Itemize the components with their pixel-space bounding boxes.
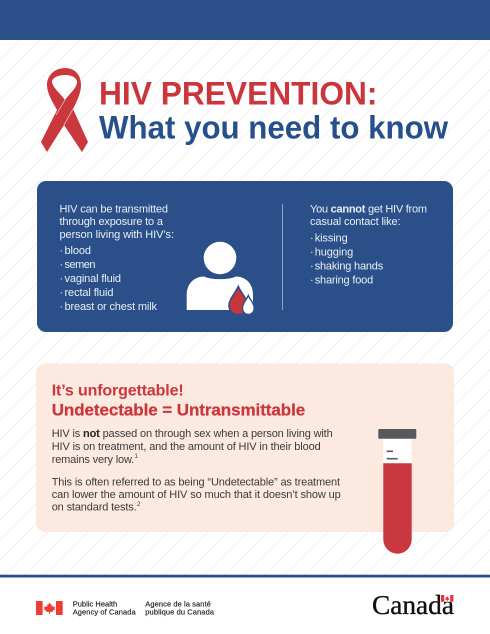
- panel: undetectable equals untransmittable: [36, 364, 454, 532]
- logo: Canada wordmark: Canada: [372, 589, 454, 620]
- agency name: Agence de la santé: [145, 600, 211, 609]
- heading: Undetectable = Untransmittable: [52, 401, 305, 420]
- text block: can be transmitted: rectal fluid: [64, 287, 114, 299]
- text block: casual contact: ·: [310, 274, 314, 286]
- text block: casual contact: ·: [310, 246, 314, 258]
- text block: explanation: HIV is not passed on through sex when a person living with: [52, 428, 333, 440]
- logo: Public Health Agency of Canada: [36, 600, 215, 617]
- text block: can be transmitted: semen: [64, 259, 96, 271]
- title: What you need to know: [99, 110, 448, 146]
- text block: can be transmitted: vaginal fluid: [64, 273, 121, 285]
- text block: explanation: [52, 428, 341, 514]
- text block: casual contact: casual contact like:: [310, 216, 400, 228]
- header band: [0, 0, 490, 40]
- text block: casual contact: ·: [310, 260, 314, 272]
- text block: can be transmitted: through exposure to a: [60, 216, 164, 228]
- text block: explanation: remains very low.: [52, 454, 134, 466]
- text block: can be transmitted: ·: [60, 301, 63, 313]
- text block: can be transmitted: blood: [64, 245, 91, 257]
- icon: person with fluid drops: [187, 242, 254, 314]
- text block: casual contact: You cannot get HIV from: [310, 203, 427, 215]
- title: HIV PREVENTION:: [99, 76, 378, 112]
- heading: It’s unforgettable!: [52, 383, 184, 400]
- text block: explanation: HIV is on treatment, and the amount of HIV in their blood: [52, 441, 321, 453]
- text block: explanation: This is often referred to as being “Undetectable” as treatment: [52, 476, 340, 488]
- text block: can be transmitted: ·: [60, 287, 63, 299]
- agency name: [73, 600, 215, 617]
- title: [99, 76, 448, 146]
- text block: casual contact: ·: [310, 232, 314, 244]
- text block: casual contact: hugging: [315, 246, 353, 258]
- heading: [52, 383, 305, 420]
- text block: can be transmitted: ·: [60, 273, 63, 285]
- text block: explanation: 2: [137, 502, 141, 508]
- text block: can be transmitted: ·: [60, 245, 63, 257]
- text block: casual contact: [310, 203, 427, 286]
- text block: casual contact: shaking hands: [315, 260, 384, 272]
- text block: explanation: on standard tests.: [52, 502, 137, 514]
- text block: can be transmitted: HIV can be transmitted: [60, 203, 168, 215]
- agency name: Agency of Canada: [73, 608, 137, 617]
- text block: explanation: can lower the amount of HIV so much that it doesn’t show up: [52, 489, 341, 501]
- text block: can be transmitted: [60, 203, 174, 313]
- text block: can be transmitted: ·: [60, 259, 63, 271]
- icon: blood test tube: [378, 429, 416, 554]
- text block: casual contact: kissing: [315, 232, 348, 244]
- text block: explanation: 1: [134, 454, 138, 460]
- text block: can be transmitted: breast or chest milk: [64, 301, 158, 313]
- panel: how HIV is transmitted: [37, 181, 453, 332]
- agency name: Public Health: [73, 600, 117, 609]
- text block: can be transmitted: person living with HIV’s:: [60, 229, 174, 241]
- icon: wordmark flag: [441, 595, 453, 602]
- icon: red ribbon: [41, 68, 88, 152]
- icon: Canadian flag: [36, 601, 63, 615]
- footer rule: [0, 575, 490, 578]
- agency name: publique du Canada: [145, 608, 215, 617]
- text block: casual contact: sharing food: [315, 274, 373, 286]
